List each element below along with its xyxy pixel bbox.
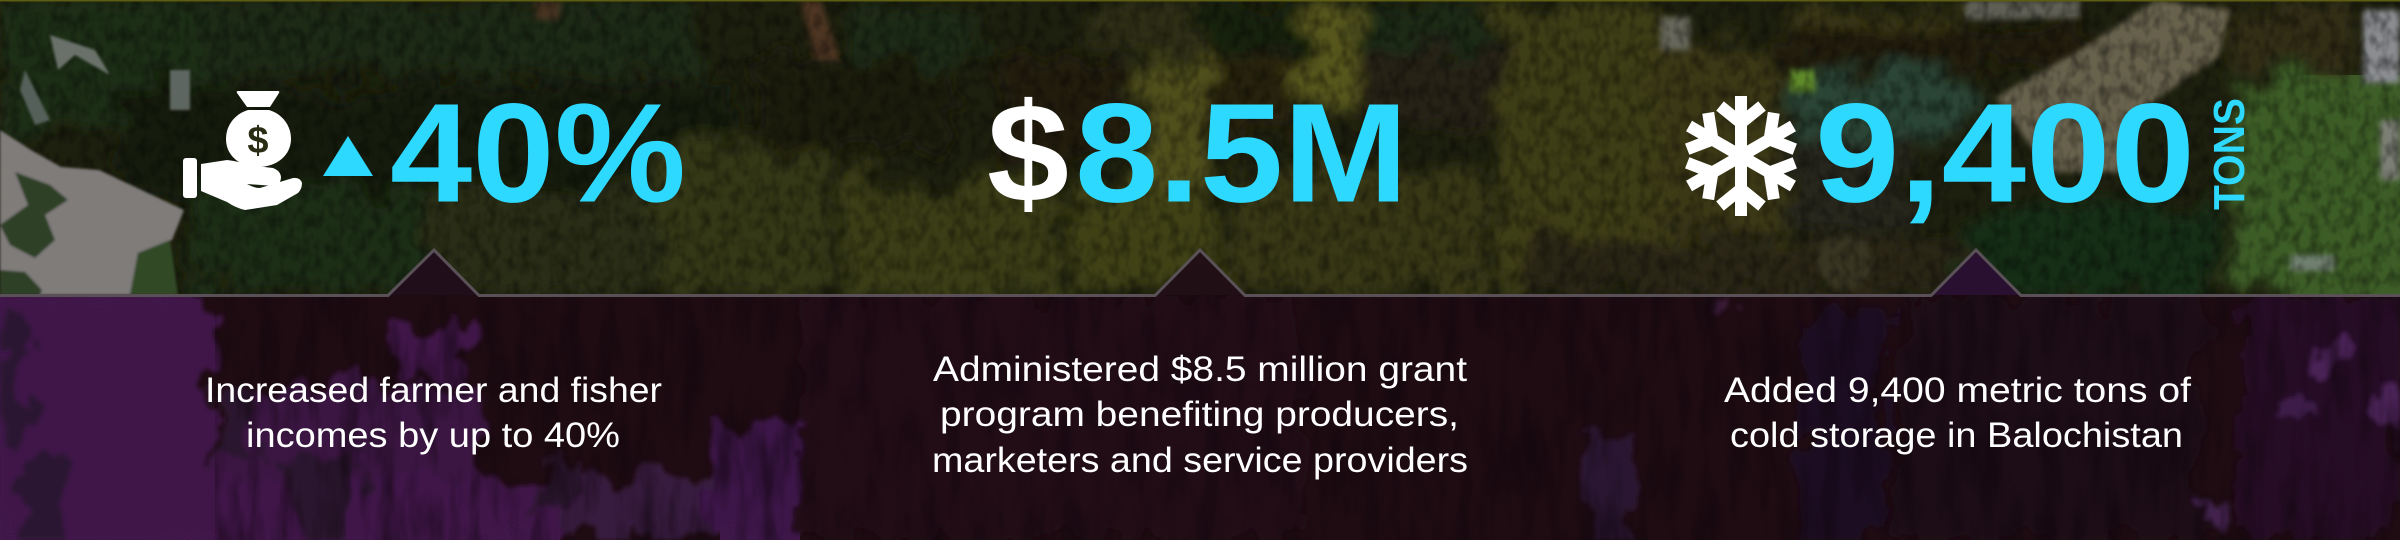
photo texture <box>0 0 2400 295</box>
background photo: grape vines on pergola <box>0 0 2400 295</box>
description: grant: Administered $8.5 million grant <box>933 350 1467 389</box>
divider line with pointers <box>0 250 2400 296</box>
description: incomes: Increased farmer and fisher <box>205 371 662 410</box>
description: grant <box>932 350 1468 480</box>
icon: money bag in hand <box>183 91 302 210</box>
icon: dollar sign on bag: $ <box>247 120 269 162</box>
number: dollar sign: $ <box>987 74 1069 232</box>
purple overlay band with photo showing through <box>0 295 2400 540</box>
stat 1: income <box>183 74 686 455</box>
description: grant: marketers and service providers <box>932 441 1468 480</box>
number: 9,400: 9,400 <box>1815 74 2195 232</box>
description: cold storage: cold storage in Balochistan <box>1730 416 2183 455</box>
stat 2: grant program <box>932 74 1468 480</box>
band texture <box>215 295 2400 540</box>
number: 40%: 40% <box>390 74 686 232</box>
description: incomes <box>205 371 662 455</box>
stat 3: cold storage <box>1679 74 2254 455</box>
icon: up triangle <box>323 136 373 176</box>
description: grant: program benefiting producers, <box>940 395 1459 434</box>
description: cold storage <box>1724 371 2191 455</box>
description: incomes: incomes by up to 40% <box>246 416 620 455</box>
unit: TONS: TONS <box>2205 98 2254 210</box>
pointer fills <box>388 250 2021 295</box>
icon: snowflake <box>1679 96 1803 216</box>
number: 8.5M: 8.5M <box>1075 74 1408 232</box>
pointer outline <box>0 250 2400 296</box>
description: cold storage: Added 9,400 metric tons of <box>1724 371 2191 410</box>
